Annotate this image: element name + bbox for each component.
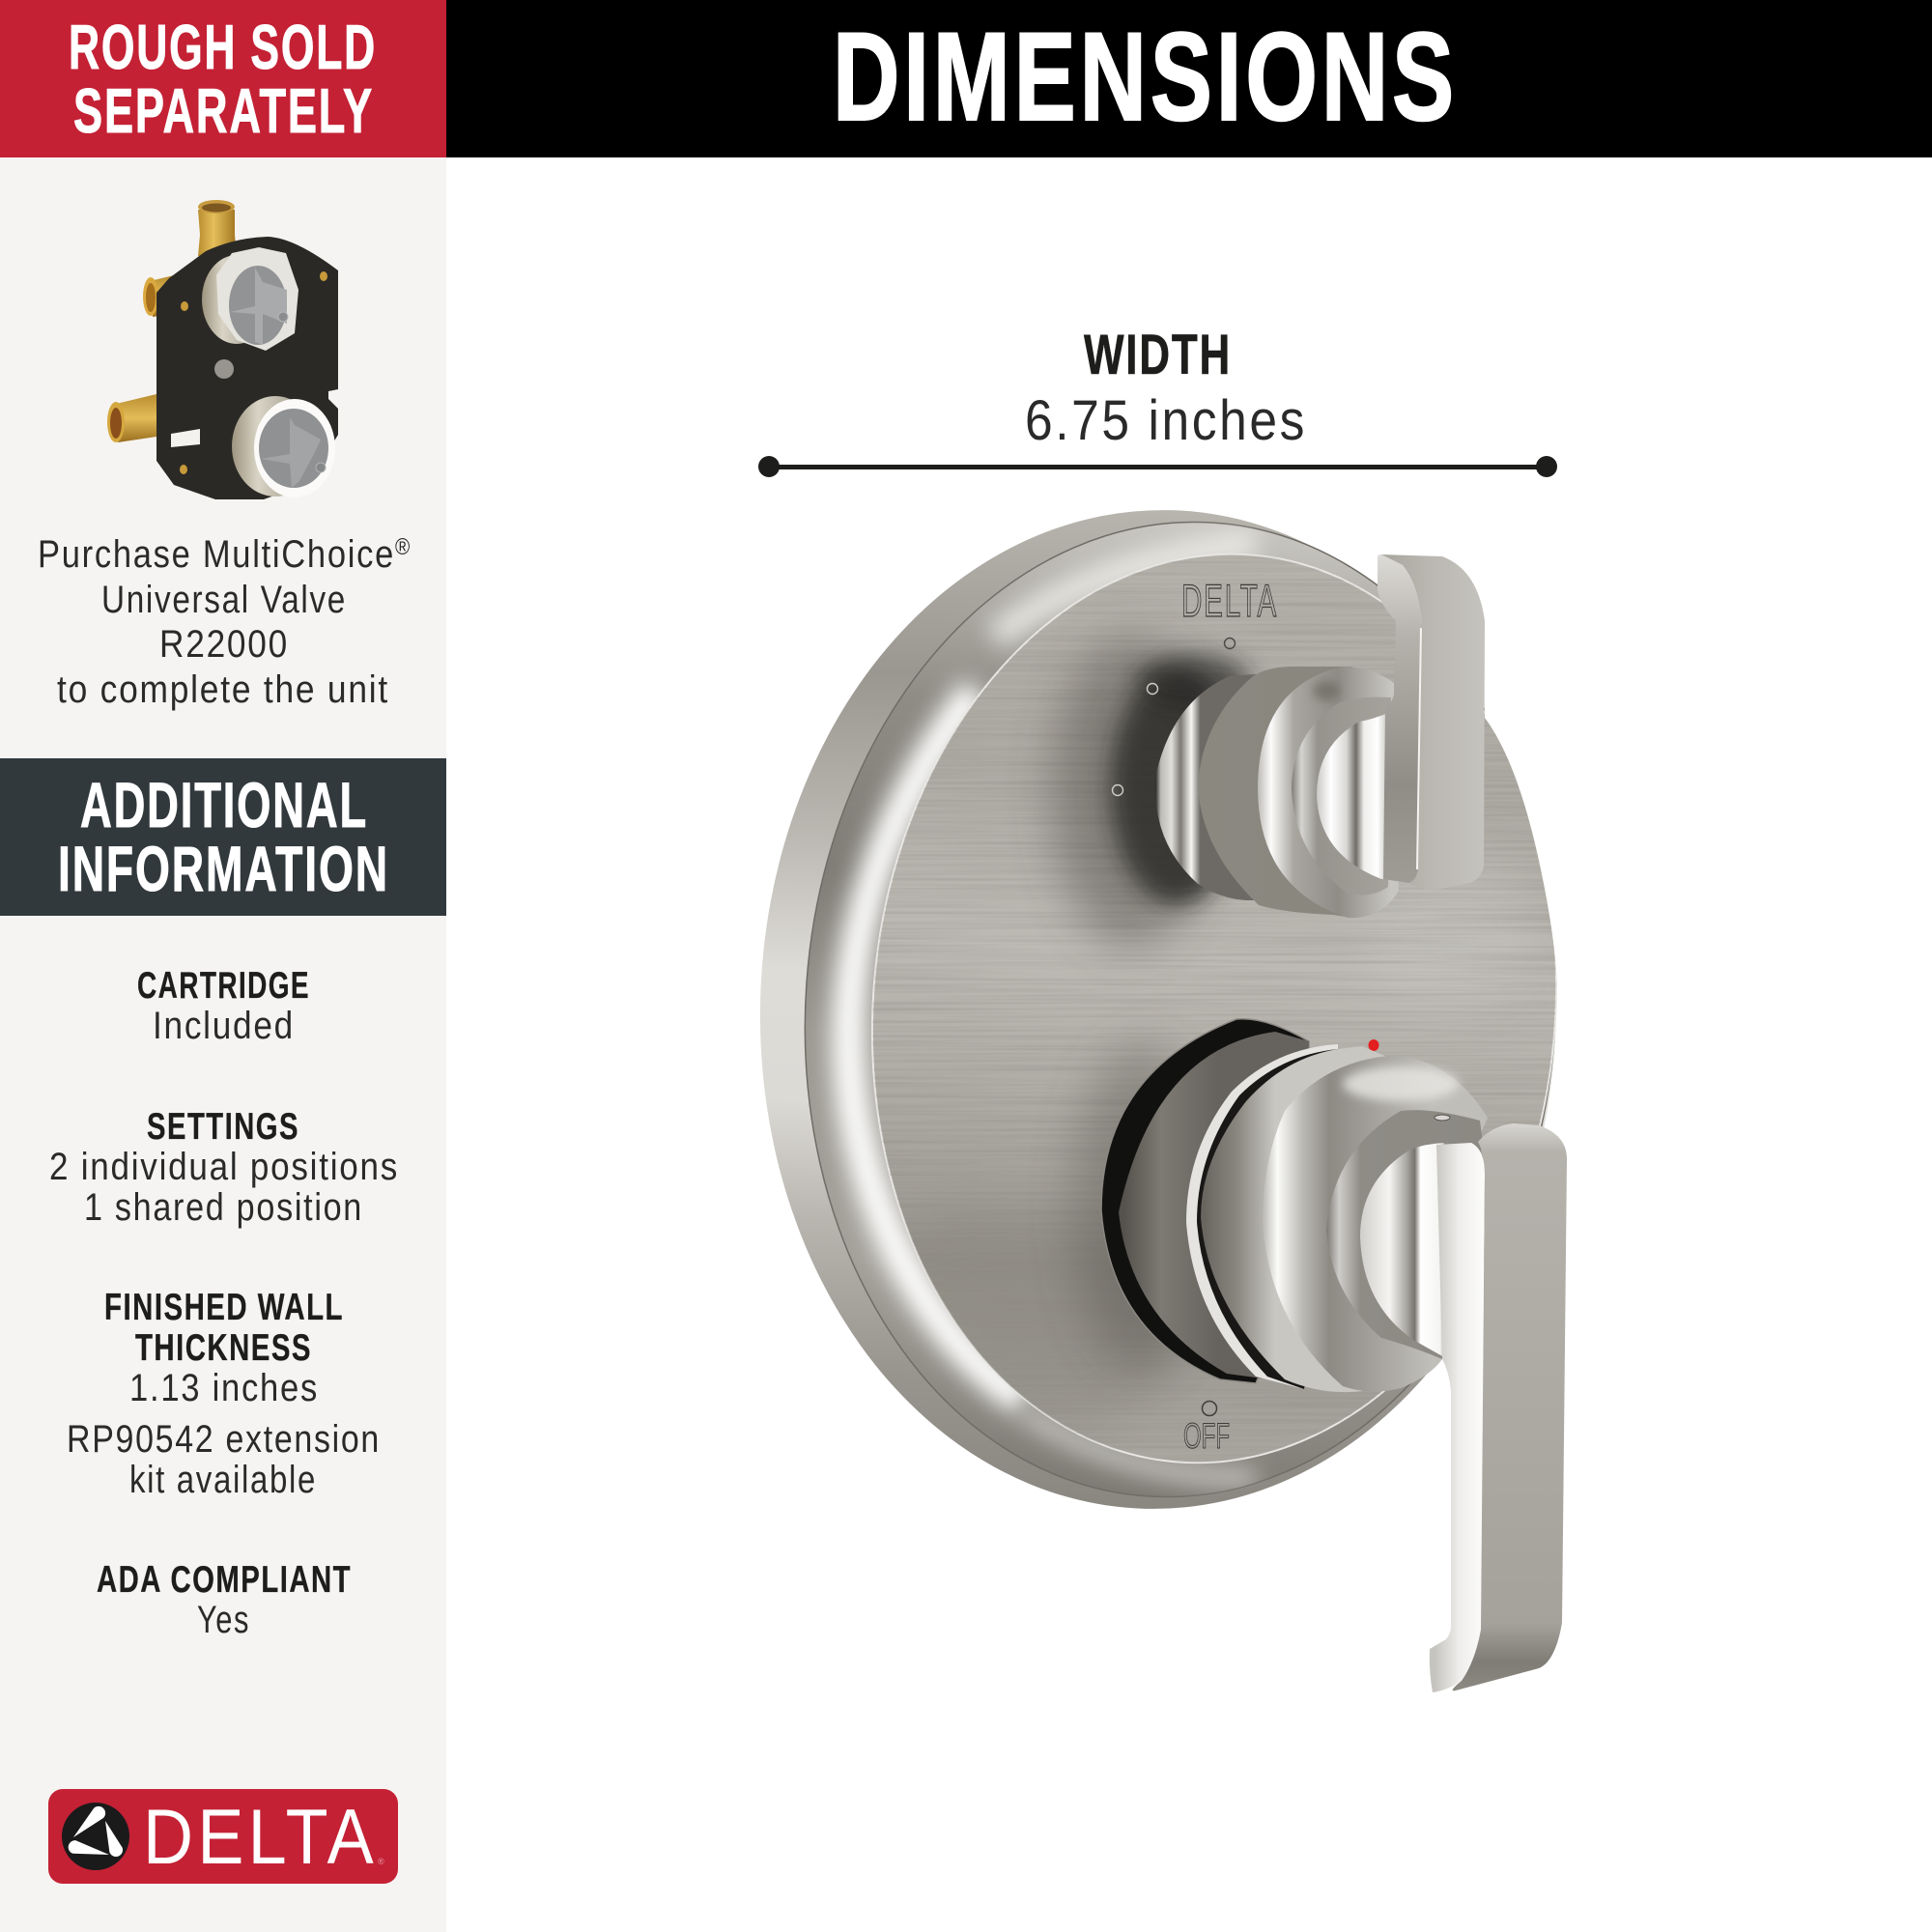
spec: finished wall thickness [67, 1287, 381, 1501]
line 1: ® [395, 534, 412, 560]
upper lever [1378, 554, 1485, 891]
red hot indicator [1368, 1039, 1379, 1051]
dimension label: width: WIDTH [1084, 324, 1232, 386]
value: 1.13 inches [129, 1367, 319, 1409]
screw [214, 359, 234, 379]
value: Included [153, 1005, 295, 1047]
bright ring [1186, 1044, 1338, 1389]
sidebar background [0, 157, 446, 1932]
lower lever [1430, 1123, 1567, 1692]
line 1: Purchase MultiChoice [38, 533, 452, 576]
title bar: dimensions [446, 0, 1932, 157]
spec: ada compliant [97, 1559, 352, 1641]
registered mark: ® [378, 1857, 384, 1866]
slot in plate [171, 429, 200, 447]
brass pipes [107, 200, 307, 442]
lever front face [1381, 554, 1485, 891]
indicator dots [1113, 638, 1235, 796]
plate shading and brushed texture [821, 551, 1565, 1478]
rough-in valve image [107, 200, 338, 499]
banner text line 1: ROUGH SOLD [69, 12, 377, 82]
ring top highlight [1343, 1066, 1459, 1101]
outer rim [748, 499, 1569, 1520]
lower nut [232, 396, 335, 497]
front ring [1258, 667, 1399, 918]
upper knob shadow [1111, 669, 1242, 905]
spec: cartridge [137, 965, 310, 1047]
product: shower trim [748, 497, 1594, 1692]
value line 1: 2 individual positions [49, 1146, 399, 1188]
dark recess [1101, 1019, 1309, 1383]
lower knob [1101, 1019, 1488, 1392]
collar [1119, 1032, 1309, 1383]
ring highlights [848, 543, 1256, 1478]
upper nut [202, 247, 298, 351]
line 4: to complete the unit [57, 668, 389, 711]
text: purchase MultiChoice valve [38, 533, 412, 711]
collar [1155, 674, 1256, 900]
middle ring [804, 522, 1555, 1497]
lever opening [1317, 713, 1388, 879]
section heading: additional information [0, 758, 446, 916]
body [1198, 667, 1352, 918]
line 2: Universal Valve [101, 579, 347, 621]
faceplate [871, 554, 1557, 1464]
plate engraving: off [1183, 1401, 1230, 1456]
spec: settings: SETTINGS [147, 1106, 299, 1148]
lower knob shadow [1072, 1043, 1208, 1372]
heading line 1: ADDITIONAL [80, 769, 368, 840]
heading line 2: INFORMATION [58, 833, 389, 904]
lever side strip [1378, 554, 1422, 883]
banner: rough sold separately [0, 0, 446, 157]
value line 2: 1 shared position [84, 1186, 363, 1229]
value: Yes [197, 1599, 250, 1641]
width value: 6.75 inches [1025, 389, 1307, 452]
spec: settings [49, 1106, 399, 1229]
dimension line with end dots [758, 456, 1557, 477]
logo wordmark: DELTA [143, 1794, 378, 1881]
note line 2: kit available [129, 1459, 317, 1501]
lever side strip [1430, 1143, 1485, 1692]
ring shadow spot [1313, 681, 1340, 700]
heading line 2: THICKNESS [135, 1327, 312, 1369]
spec: cartridge: CARTRIDGE [137, 965, 310, 1007]
front ring [1263, 1056, 1488, 1392]
spec: finished wall thickness: FINISHED WALL [104, 1287, 344, 1328]
plate engraving: delta: DELTA [1181, 575, 1278, 626]
note line 1: RP90542 extension [67, 1418, 381, 1461]
title: DIMENSIONS [833, 6, 1458, 147]
body [1201, 1046, 1401, 1392]
spec: ada compliant: ADA COMPLIANT [97, 1559, 352, 1601]
black mounting plate [156, 237, 338, 499]
banner text line 2: SEPARATELY [73, 75, 374, 146]
lever front face [1453, 1123, 1567, 1690]
dimension label: width [1025, 324, 1307, 452]
top screw [1435, 1115, 1450, 1121]
lever opening [1360, 1143, 1444, 1357]
trim of plate edge right of the upper lever [1484, 618, 1589, 1005]
logo: Delta [48, 1789, 398, 1884]
dark gap [1197, 1049, 1338, 1389]
upper knob [1155, 667, 1399, 918]
inner tube and arm [1326, 1110, 1483, 1359]
plate engraving: off: OFF [1183, 1416, 1230, 1456]
logo emblem [62, 1803, 129, 1870]
mounting holes [180, 271, 327, 474]
lever bright edge [1417, 628, 1421, 869]
inner tube [1292, 697, 1391, 895]
line 3: R22000 [159, 623, 289, 666]
